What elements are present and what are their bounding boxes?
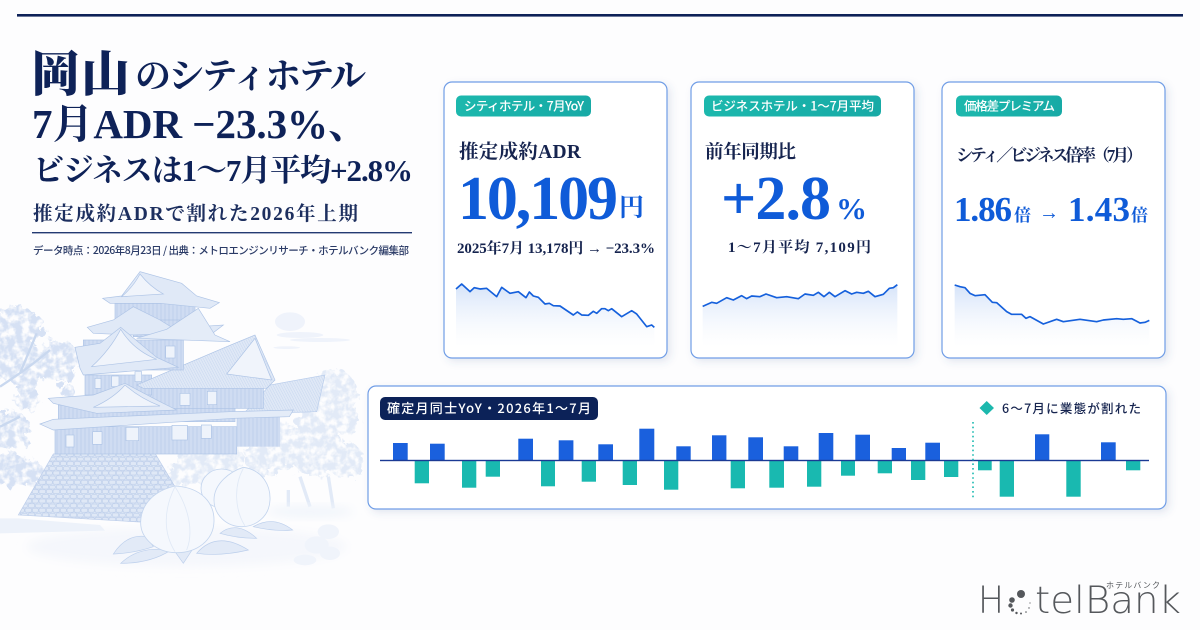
sparkline: business ADR: [703, 285, 897, 347]
legend note: 6〜7月に業態が割れた: [1002, 398, 1141, 417]
castle: [18, 272, 325, 522]
logo kana: ホテルバンク: [1106, 580, 1160, 591]
lower gable: [48, 383, 177, 413]
upper bodies: [83, 340, 183, 370]
bars: positive: [393, 429, 1116, 460]
title line 1: [31, 47, 366, 102]
tree trunks: [288, 477, 333, 508]
subtitle: 推定成約ADRで割れた2026年上期: [33, 202, 358, 225]
stone base: [18, 449, 175, 522]
leaves: [113, 522, 293, 563]
metric value: →: [1039, 202, 1059, 224]
panel: monthly YoY bar chart: [368, 386, 1166, 509]
metric value: 倍: [1131, 206, 1148, 225]
badge: premium: 価格差プレミアム: [964, 96, 1055, 114]
chart heading: 確定月同士YoY・2026年1〜7月: [387, 398, 591, 417]
metric value: 10,109: [458, 165, 618, 233]
metric value: %: [836, 191, 867, 226]
tree branches: [0, 333, 50, 427]
badge: city hotel: シティホテル・7月YoY: [464, 96, 584, 114]
clouds: [273, 312, 350, 349]
mid roofs: [87, 307, 223, 335]
ground: [0, 506, 353, 567]
sparkline: premium ratio: [955, 285, 1149, 347]
panel: price premium: [942, 82, 1165, 358]
trees left: [0, 307, 79, 487]
metric label: 前年同期比: [705, 141, 796, 163]
third body: [150, 387, 263, 408]
panel: business hotel: [691, 82, 914, 358]
peaches: [141, 467, 270, 553]
baseline: [380, 460, 1149, 461]
sparkline: city ADR: [456, 284, 654, 347]
metric value: [954, 190, 1148, 229]
big front roof: [137, 335, 275, 388]
metric label: シティ／ビジネス倍率（7月）: [956, 146, 1143, 165]
subtitle rule: [32, 232, 412, 233]
metric value: 円: [619, 195, 644, 222]
second body: [58, 405, 235, 422]
trees right: [167, 369, 363, 489]
comparison line: 2025年7月 13,178円 → −23.3%: [457, 239, 655, 257]
lower body: [55, 427, 237, 454]
logo wordmark telBank: telBank: [1035, 579, 1181, 622]
badge: business hotel: ビジネスホテル・1〜7月平均: [711, 96, 874, 114]
metric value: 倍: [1014, 206, 1031, 225]
logo: HotelBank: [978, 579, 1181, 622]
title: [31, 47, 413, 188]
top rule: [17, 14, 1183, 17]
logo dots: [1008, 590, 1031, 614]
bars: negative: [415, 460, 1140, 497]
title line 2: 7月ADR −23.3%、: [32, 101, 369, 147]
title line 1: のシティホテル: [135, 56, 366, 96]
illustration: Okayama castle and peaches: [0, 272, 363, 567]
panel: city hotel: [444, 82, 667, 358]
comparison line: 1〜7月平均 7,109円: [728, 239, 871, 256]
title line 1: 岡山: [31, 47, 130, 102]
metric value: 1.43: [1068, 190, 1130, 229]
metric value: 1.86: [954, 190, 1012, 229]
metric value: +2.8: [721, 165, 831, 233]
divider: June to July split: [972, 422, 974, 498]
top roof: [103, 272, 219, 308]
source note: データ時点：2026年8月23日 / 出典：メトロエンジンリサーチ・ホテルバンク編集部: [33, 243, 410, 258]
logo wordmark H: H: [978, 579, 1004, 622]
metric label: 推定成約ADR: [459, 141, 582, 163]
right wing roof: [243, 375, 325, 414]
title line 3: ビジネスは1〜7月平均+2.8%: [33, 153, 413, 188]
